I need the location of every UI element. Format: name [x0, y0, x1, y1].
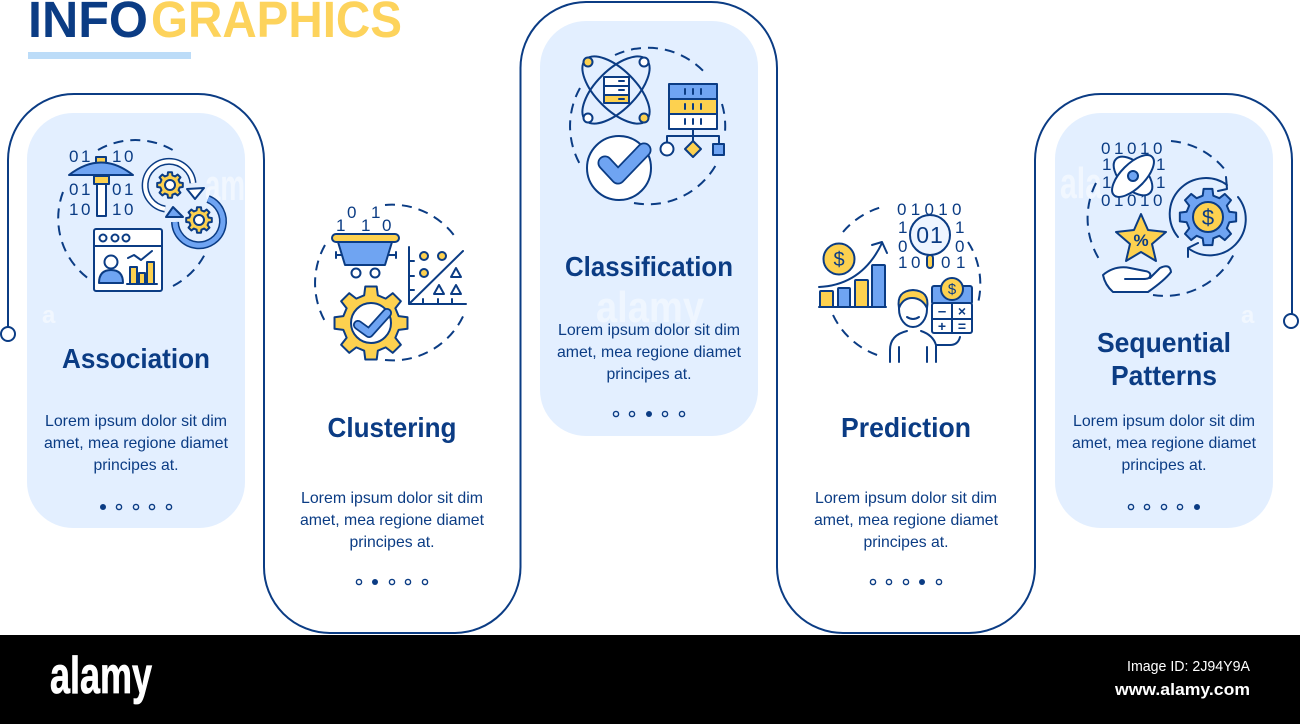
- body text: [557, 322, 742, 383]
- watermarks: am: [205, 161, 245, 210]
- body text: principes at.: [1122, 457, 1206, 474]
- body text: Lorem ipsum dolor sit dim: [45, 413, 227, 430]
- panel: sequential patterns: [1072, 139, 1257, 510]
- watermarks: a: [1241, 302, 1255, 329]
- icon: sequential patterns: %: [1133, 231, 1149, 250]
- body text: amet, mea regione diamet: [300, 512, 485, 529]
- icon: prediction: +: [938, 318, 946, 334]
- icon: data mining: 10: [112, 147, 136, 166]
- icon: sequential patterns: 1: [1102, 155, 1114, 174]
- body text: principes at.: [864, 534, 948, 551]
- watermark: alamy: [596, 283, 704, 332]
- icon: data mining: 10: [112, 200, 136, 219]
- footer logo: alamy: [50, 647, 152, 705]
- body text: principes at.: [94, 457, 178, 474]
- icon: prediction: 0: [955, 237, 967, 256]
- heading: Prediction: [841, 412, 971, 443]
- body text: amet, mea regione diamet: [44, 435, 229, 452]
- icon: prediction: 1: [955, 218, 967, 237]
- icon: prediction: 0: [898, 237, 910, 256]
- icon: sequential patterns: 1: [1156, 155, 1168, 174]
- body text: principes at.: [350, 534, 434, 551]
- icon: data mining: 01: [69, 180, 93, 199]
- website: www.alamy.com: [1114, 680, 1250, 699]
- panel: clustering: [300, 203, 485, 585]
- icon: sequential patterns: 01010: [1101, 139, 1165, 158]
- watermarks: [42, 159, 1255, 329]
- body text: [1072, 413, 1257, 474]
- icon: prediction: 01010: [897, 200, 964, 219]
- icon: clustering: 1: [336, 216, 348, 235]
- heading: Clustering: [328, 412, 456, 443]
- panel: association: [44, 140, 229, 510]
- outline end node: [1284, 314, 1298, 328]
- image id: Image ID: 2J94Y9A: [1127, 658, 1250, 675]
- icon: clustering: 0: [382, 216, 394, 235]
- body text: amet, mea regione diamet: [1072, 435, 1257, 452]
- watermarks: ala: [1060, 159, 1102, 208]
- icon: data mining: 10: [69, 200, 93, 219]
- watermarks: a: [42, 302, 56, 329]
- body text: [44, 413, 229, 474]
- body text: amet, mea regione diamet: [814, 512, 999, 529]
- light panel backgrounds: [27, 21, 1273, 528]
- icon: prediction: =: [958, 318, 966, 334]
- icon: data mining: [58, 140, 223, 291]
- heading: Classification: [565, 251, 733, 282]
- icon: sequential patterns: [1088, 139, 1246, 296]
- icon: clustering: 1: [371, 203, 383, 222]
- icon: clustering: 0: [347, 203, 359, 222]
- pagination dots: [100, 504, 172, 510]
- icon: data mining: 01: [69, 147, 93, 166]
- icon: prediction: 1: [898, 253, 910, 272]
- icon: prediction: [819, 200, 980, 362]
- title underline: [28, 52, 191, 59]
- icon: prediction: $: [833, 249, 845, 271]
- icon: prediction: –: [938, 303, 946, 320]
- body text: Lorem ipsum dolor sit dim: [1073, 413, 1255, 430]
- pagination dots: [613, 411, 685, 417]
- body text: Lorem ipsum dolor sit dim: [815, 490, 997, 507]
- icon: prediction: $: [948, 281, 957, 298]
- icon: sequential patterns: 01010: [1101, 191, 1165, 210]
- body text: [300, 490, 485, 551]
- icon: sequential patterns: 1: [1156, 173, 1168, 192]
- body text: [814, 490, 999, 551]
- icon: clustering: [315, 203, 466, 360]
- footer bar: [0, 635, 1300, 724]
- icon: prediction: 01: [916, 222, 944, 248]
- heading: Association: [62, 343, 210, 374]
- icon: data mining: 01: [112, 180, 136, 199]
- heading: Patterns: [1111, 360, 1217, 391]
- title: [28, 0, 402, 48]
- pagination dots: [1128, 504, 1200, 510]
- body text: amet, mea regione diamet: [557, 344, 742, 361]
- icon: sequential patterns: 1: [1102, 173, 1114, 192]
- icon: prediction: 0: [941, 253, 953, 272]
- body text: principes at.: [606, 366, 692, 383]
- icon: prediction: 1: [898, 218, 910, 237]
- icon: classification: [570, 45, 725, 204]
- body text: Lorem ipsum dolor sit dim: [558, 322, 740, 339]
- icon: clustering: 1: [361, 216, 373, 235]
- icon: prediction: 0: [911, 253, 923, 272]
- heading: Sequential: [1097, 327, 1231, 358]
- panel: prediction: [814, 200, 999, 585]
- heading: [1097, 327, 1231, 391]
- panel: classification: [557, 45, 742, 417]
- body text: Lorem ipsum dolor sit dim: [301, 490, 483, 507]
- icon: prediction: ×: [958, 303, 966, 319]
- pagination dots: [356, 579, 428, 585]
- icon: prediction: 1: [956, 253, 968, 272]
- icon: sequential patterns: $: [1202, 205, 1214, 230]
- outline start node: [1, 327, 15, 341]
- pagination dots: [870, 579, 942, 585]
